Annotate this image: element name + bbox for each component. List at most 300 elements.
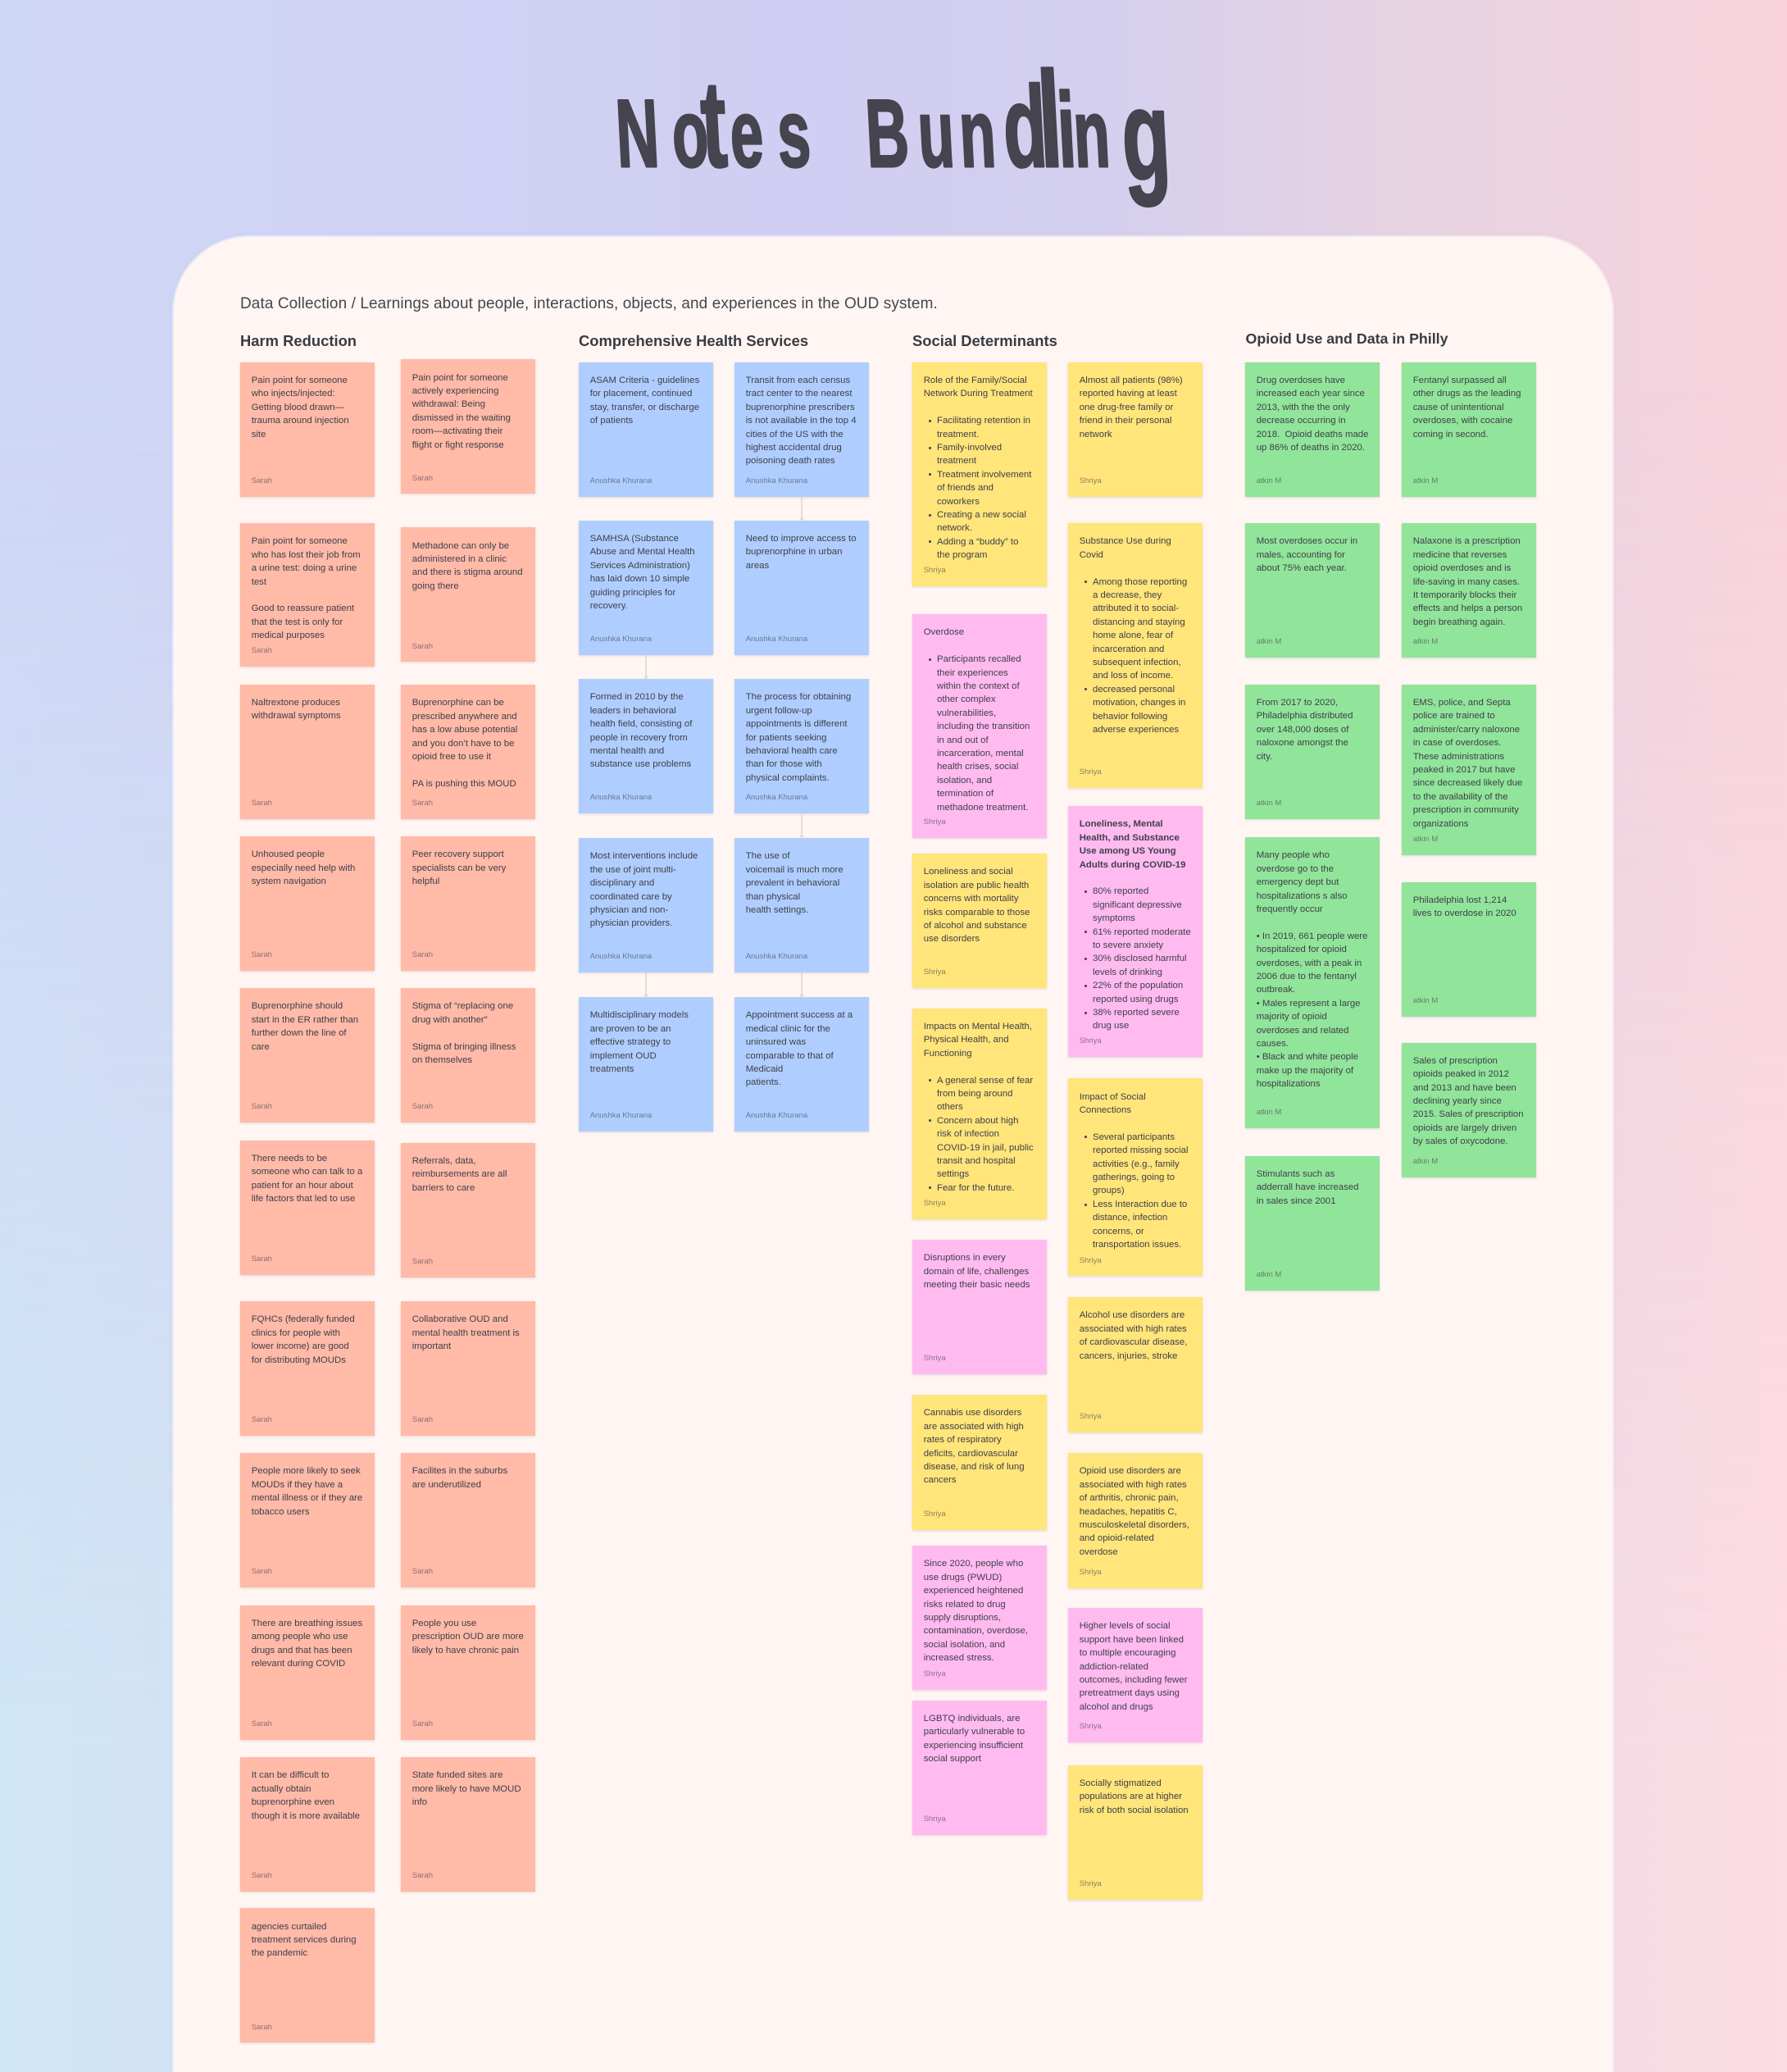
note: opioid use disorders: of arthritis, chronic pain, <box>1080 1493 1179 1503</box>
note: curtailed services: the pandemic <box>252 1948 307 1958</box>
note: EMS and police: since decreased likely due <box>1413 778 1522 788</box>
note: joint interventions: the use of joint multi- <box>590 865 676 875</box>
note: loneliness young adults: Shriya <box>1080 1036 1102 1045</box>
note: transit to prescribers: tract center to the nearest <box>746 389 852 398</box>
note: since 2020: contamination, overdose, <box>924 1626 1028 1636</box>
note: LGBTQ individuals: particularly vulnerable to <box>924 1727 1025 1737</box>
note: substance use during covid: decreased personal <box>1093 685 1175 694</box>
note: chronic pain <box>401 1605 535 1740</box>
note: emergency dept: outbreak. <box>1257 985 1295 995</box>
note: drug-free network: Shriya <box>1080 476 1102 485</box>
note: curtailed services: agencies curtailed <box>252 1922 327 1932</box>
note: impacts on health: transit and hospital <box>937 1156 1016 1166</box>
note: ASAM criteria: of patients <box>590 416 633 426</box>
note: urgent follow-up: behavioral health care <box>746 746 838 756</box>
note: stigma <box>401 988 535 1123</box>
note: withdrawal pain point: Pain point for someone <box>412 373 508 383</box>
note: more likely to seek MOUDs <box>240 1453 375 1587</box>
note: LGBTQ individuals: social support <box>924 1754 981 1764</box>
note: emergency dept: • In 2019, 661 people were <box>1257 931 1367 941</box>
note: naloxone distributed <box>1245 685 1380 819</box>
note: transit to prescribers: highest accidental drug <box>746 443 842 453</box>
note: urine test pain point: that the test is only for <box>252 617 343 627</box>
note: appointment success: Medicaid <box>746 1064 783 1074</box>
note: joint interventions: disciplinary and <box>590 878 654 888</box>
note: nalaxone: It temporarily blocks their <box>1413 590 1516 600</box>
note: chronic pain: People you use <box>412 1619 476 1628</box>
note: blood drawn pain point: trauma around injection <box>252 416 349 426</box>
note: peer recovery: helpful <box>412 877 439 886</box>
note: loneliness young adults: Use among US Young <box>1080 846 1176 856</box>
note: EMS and police: prescription in community <box>1413 805 1519 815</box>
note: impacts on health: Functioning <box>924 1049 972 1059</box>
note: collaborative treatment: Collaborative OUD and <box>412 1314 508 1324</box>
note: impact of social connections: reported missing social <box>1093 1145 1188 1155</box>
note: impact of social connections: distance, infection <box>1093 1213 1167 1223</box>
note: urgent follow-up: urgent follow-up <box>746 706 812 716</box>
note: naltrexone: withdrawal symptoms <box>252 711 341 721</box>
note: impact of social connections: concerns, or <box>1093 1227 1144 1236</box>
note: impacts on health: settings <box>937 1169 969 1179</box>
note: withdrawal pain point: actively experiencing <box>412 386 498 396</box>
note: voicemail: health settings. <box>746 905 808 915</box>
title: Notes Bundling: n <box>957 80 998 187</box>
note: loneliness young adults: 61% reported moderate <box>1093 927 1191 937</box>
note: overdose: including the transition <box>937 722 1030 731</box>
note: impact of social connections: groups) <box>1093 1186 1125 1195</box>
note: naloxone distributed: over 148,000 doses of <box>1257 725 1348 735</box>
note: stigma: drug with another” <box>412 1015 487 1025</box>
heading: Harm Reduction: Harm Reduction <box>240 332 357 349</box>
title: Notes Bundling: g <box>1118 65 1174 207</box>
note: loneliness young adults: drug use <box>1093 1021 1129 1031</box>
note: loneliness public health: Shriya <box>924 968 946 977</box>
note: transit to prescribers: poisoning death rates <box>746 456 835 466</box>
note: transit to prescribers: is not available in the top 4 <box>746 416 857 426</box>
note: blood drawn pain point <box>240 362 375 497</box>
note: joint interventions: coordinated care by <box>590 892 672 902</box>
note: FQHCs: for distributing MOUDs <box>252 1355 346 1365</box>
heading: Social Determinants: Social Determinants <box>912 332 1057 349</box>
note: multidisciplinary models: treatments <box>590 1064 634 1074</box>
note: blood drawn pain point: Pain point for someone <box>252 376 348 385</box>
note: improve access: Anushka Khurana <box>746 635 807 644</box>
note: overdose: incarceration, mental <box>937 749 1024 758</box>
note: urgent follow-up: appointments is different <box>746 719 848 729</box>
note: drug overdoses increased: up 86% of deaths in 2020. <box>1257 443 1365 453</box>
note: curtailed services: treatment services during <box>252 1935 357 1945</box>
note: more likely to seek MOUDs: MOUDs if they have a <box>252 1480 343 1490</box>
note: emergency dept: emergency dept but <box>1257 877 1339 887</box>
note: joint interventions <box>579 838 713 972</box>
note: loneliness young adults: 80% reported <box>1093 886 1148 896</box>
note: buprenorphine in ER: Sarah <box>252 1102 272 1111</box>
note: barriers to care: Referrals, data, <box>412 1156 476 1166</box>
note: fentanyl <box>1402 362 1536 497</box>
note: voicemail: The use of <box>746 851 790 861</box>
title: Notes Bundling: o <box>669 80 711 187</box>
note: breathing issues: among people who use <box>252 1632 348 1642</box>
panel: Opioid Use and Data in Philly <box>1244 330 1537 1292</box>
note: emergency dept: Many people who <box>1257 850 1330 860</box>
note: LGBTQ individuals: experiencing insufficient <box>924 1741 1023 1751</box>
note: alcohol use disorders: of cardiovascular disease, <box>1080 1337 1187 1347</box>
note: ASAM criteria: ASAM Criteria - guidelines <box>590 376 699 385</box>
note: overdose: their experiences <box>937 667 1008 677</box>
note: withdrawal pain point: withdrawal: Being <box>412 399 485 409</box>
note: impacts on health: risk of infection <box>937 1129 999 1139</box>
note: since 2020: Shriya <box>924 1669 946 1678</box>
note: loneliness young adults: symptoms <box>1093 913 1135 923</box>
note: improve access: buprenorphine in urban <box>746 547 842 557</box>
note: urine test pain point: test <box>252 577 266 587</box>
note: urine test pain point: Good to reassure patient <box>252 603 354 613</box>
note: appointment success: medical clinic for the <box>746 1024 830 1034</box>
note: Philadelphia lost lives: lives to overdose in 2020 <box>1413 908 1516 918</box>
note: FQHCs: lower income) are good <box>252 1341 349 1351</box>
note: formed in 2010: health field, consisting of <box>590 719 692 729</box>
note: loneliness young adults: to severe anxiety <box>1093 940 1163 950</box>
note: formed in 2010: Formed in 2010 by the <box>590 692 684 702</box>
note: substance use during covid: incarceration and <box>1093 644 1164 654</box>
note: higher social support <box>1068 1608 1203 1742</box>
note: substance use during covid: behavior following <box>1093 712 1167 722</box>
note: substance use during covid <box>1068 523 1203 788</box>
note: cannabis use disorders: deficits, cardiovascular <box>924 1449 1018 1459</box>
note: EMS and police: administer/carry naloxone <box>1413 725 1520 735</box>
note: role of family: Family-involved <box>937 443 1002 453</box>
note: emergency dept: overdoses, with a peak in <box>1257 959 1362 968</box>
note: impact of social connections: Shriya <box>1080 1256 1102 1265</box>
note: state funded sites: more likely to have MOUD <box>412 1784 521 1794</box>
note: suburban facilities: Facilites in the suburbs <box>412 1466 507 1476</box>
note: role of family: Adding a “buddy” to <box>937 537 1018 547</box>
note: role of family: Role of the Family/Social <box>924 376 1027 385</box>
note: withdrawal pain point: flight or fight response <box>412 440 504 450</box>
note: appointment success <box>734 997 869 1132</box>
note: role of family: Creating a new social <box>937 510 1026 520</box>
note: urgent follow-up: Anushka Khurana <box>746 793 807 802</box>
note: urine test pain point: who has lost their job from <box>252 550 361 560</box>
note: methadone clinic: administered in a clinic <box>412 554 507 564</box>
note: transit to prescribers <box>734 362 869 497</box>
note: cannabis use disorders: disease, and risk of lung <box>924 1462 1025 1472</box>
note: fentanyl: Fentanyl surpassed all <box>1413 376 1507 385</box>
note: unhoused people: system navigation <box>252 877 326 886</box>
note: multidisciplinary models: effective strategy to <box>590 1037 671 1047</box>
note: substance use during covid: home alone, fear of <box>1093 631 1173 640</box>
note: joint interventions: physician providers. <box>590 918 672 928</box>
note: males <box>1245 523 1380 658</box>
note: buprenorphine prescribed: PA is pushing this MOUD <box>412 779 516 789</box>
note: loneliness young adults: Adults during COVID-19 <box>1080 860 1185 870</box>
note: impact of social connections: Impact of Social <box>1080 1092 1146 1102</box>
note: Philadelphia lost lives: atkin M <box>1413 996 1438 1005</box>
note: breathing issues: drugs and that has been <box>252 1646 352 1655</box>
note: role of family: network. <box>937 523 972 533</box>
note: role of family: of friends and <box>937 483 994 493</box>
note: difficult to obtain: Sarah <box>252 1871 272 1880</box>
note: loneliness public health: concerns with mortality <box>924 894 1019 904</box>
note: barriers to care: barriers to care <box>412 1183 475 1193</box>
note: higher social support: alcohol and drugs <box>1080 1702 1153 1712</box>
note: drug overdoses increased: 2013, with the the only <box>1257 403 1350 412</box>
note: nalaxone: effects and helps a person <box>1413 603 1522 613</box>
note: urine test pain point <box>240 523 375 667</box>
note: overdose: in and out of <box>937 735 989 745</box>
note: higher social support: pretreatment days using <box>1080 1688 1180 1698</box>
note: more likely to seek MOUDs: mental illness or if they are <box>252 1493 362 1503</box>
note: drug overdoses increased <box>1245 362 1380 497</box>
note: blood drawn pain point: Sarah <box>252 476 272 485</box>
note: formed in 2010: people in recovery from <box>590 733 688 743</box>
note: since 2020 <box>912 1546 1047 1690</box>
note: state funded sites: Sarah <box>412 1871 433 1880</box>
note: urgent follow-up: for patients seeking <box>746 733 826 743</box>
title: Notes Bundling <box>613 44 1174 208</box>
note: buprenorphine prescribed: Sarah <box>412 799 433 808</box>
note: alcohol use disorders: Alcohol use disorders are <box>1080 1310 1185 1320</box>
heading: Opioid Use and Data in Philly: Opioid Use and Data in Philly <box>1246 330 1448 347</box>
note: buprenorphine prescribed: and you don’t have to be <box>412 739 514 749</box>
note: difficult to obtain <box>240 1757 375 1892</box>
note: substance use during covid: Covid <box>1080 550 1103 560</box>
note: barriers to care <box>401 1143 535 1277</box>
note: someone to talk to: Sarah <box>252 1255 272 1264</box>
note: since 2020: use drugs (PWUD) <box>924 1573 1002 1582</box>
note: role of family: the program <box>937 550 987 560</box>
note: appointment success: patients. <box>746 1077 781 1087</box>
note: impact of social connections: gatherings, going to <box>1093 1173 1175 1182</box>
note: difficult to obtain: actually obtain <box>252 1784 311 1794</box>
note: role of family <box>912 362 1047 586</box>
note: suburban facilities: are underutilized <box>412 1480 481 1490</box>
note: substance use during covid: subsequent infection, <box>1093 658 1181 667</box>
note: buprenorphine in ER: Buprenorphine should <box>252 1001 343 1011</box>
note: cannabis use disorders: are associated with high <box>924 1422 1024 1432</box>
note: SAMHSA: Services Administration) <box>590 561 690 571</box>
note: loneliness young adults: reported using drugs <box>1093 995 1178 1004</box>
note: disruptions: domain of life, challenges <box>924 1267 1029 1277</box>
note: curtailed services: Sarah <box>252 2023 272 2032</box>
note: FQHCs: Sarah <box>252 1415 272 1424</box>
note: emergency dept: hospitalizations s also <box>1257 891 1348 901</box>
note: suburban facilities <box>401 1453 535 1587</box>
note: cannabis use disorders: rates of respiratory <box>924 1435 1002 1445</box>
note: drug-free network <box>1068 362 1203 497</box>
note: substance use during covid: a decrease, they <box>1093 590 1162 600</box>
note: fentanyl: coming in second. <box>1413 430 1489 439</box>
note: impacts on health: others <box>937 1102 963 1112</box>
note: appointment success: Appointment success at a <box>746 1010 853 1020</box>
note: socially stigmatized: Socially stigmatized <box>1080 1778 1162 1788</box>
arrow: transit to access <box>799 497 804 521</box>
note: unhoused people: especially need help with <box>252 863 355 873</box>
arrow: voicemail to appointment success <box>799 972 804 997</box>
arrow: interventions to multidisciplinary <box>643 972 648 997</box>
note: withdrawal pain point <box>401 359 535 494</box>
note: emergency dept: overdose go to the <box>1257 864 1334 874</box>
note: overdose: other complex <box>937 694 996 704</box>
note: impact of social connections: transportation issues. <box>1093 1240 1181 1250</box>
subtitle: Data Collection / Learnings about people, interactions, objects, and experiences in the OUD system. <box>240 295 938 312</box>
note: someone to talk to <box>240 1140 375 1274</box>
note: EMS and police: police are trained to <box>1413 711 1495 721</box>
title: Notes Bundling: l <box>1034 44 1066 196</box>
note: impacts on health: from being around <box>937 1089 1012 1099</box>
note: voicemail: voicemail is much more <box>746 865 843 875</box>
note: EMS and police: in case of overdoses. <box>1413 738 1501 748</box>
note: alcohol use disorders: Shriya <box>1080 1412 1102 1421</box>
note: collaborative treatment: Sarah <box>412 1415 433 1424</box>
note: multidisciplinary models: Anushka Khurana <box>590 1111 652 1120</box>
note: difficult to obtain: It can be difficult to <box>252 1770 329 1780</box>
note: drug-free network: reported having at least <box>1080 389 1177 398</box>
note: voicemail: prevalent in behavioral <box>746 878 839 888</box>
note: FQHCs: clinics for people with <box>252 1328 340 1338</box>
note: stigma: on themselves <box>412 1055 472 1065</box>
note: opioid use disorders: musculoskeletal disorders, <box>1080 1520 1189 1530</box>
note: buprenorphine in ER: start in the ER rather than <box>252 1015 358 1025</box>
note: opioid use disorders: associated with high rates <box>1080 1480 1187 1490</box>
note: naltrexone: Naltrextone produces <box>252 698 340 708</box>
note: nalaxone: life-saving in many cases. <box>1413 577 1520 587</box>
note: disruptions: Shriya <box>924 1354 946 1363</box>
note: overdose: Shriya <box>924 817 946 827</box>
note: urgent follow-up: The process for obtaining <box>746 692 851 702</box>
note: sales of prescription opioids: opioids peaked in 2012 <box>1413 1069 1509 1079</box>
note: loneliness young adults: 30% disclosed harmful <box>1093 954 1187 963</box>
note: buprenorphine prescribed: opioid free to use it <box>412 752 491 762</box>
note: loneliness young adults: Loneliness, Mental <box>1080 819 1163 829</box>
note: overdose: Overdose <box>924 627 964 637</box>
note: blood drawn pain point: site <box>252 430 266 439</box>
note: opioid use disorders: Shriya <box>1080 1568 1102 1577</box>
note: overdose: health crises, social <box>937 762 1018 772</box>
note: formed in 2010: substance use problems <box>590 759 691 769</box>
note: ASAM criteria: for placement, continued <box>590 389 692 398</box>
note: role of family: Network During Treatment <box>924 389 1033 398</box>
note: urine test pain point: a urine test: doing a urine <box>252 563 357 573</box>
note: FQHCs <box>240 1301 375 1436</box>
note: EMS and police: atkin M <box>1413 835 1438 844</box>
note: more likely to seek MOUDs: People more likely to seek <box>252 1466 361 1476</box>
note: loneliness public health: Loneliness and social <box>924 867 1013 877</box>
note: overdose: isolation, and <box>937 776 992 786</box>
note: opioid use disorders: overdose <box>1080 1547 1118 1557</box>
note: role of family: Treatment involvement <box>937 470 1031 480</box>
note: SAMHSA: Abuse and Mental Health <box>590 547 695 557</box>
note: higher social support: support have been linked <box>1080 1635 1184 1645</box>
title: Notes Bundling: i <box>1054 71 1079 189</box>
note: EMS and police: EMS, police, and Septa <box>1413 698 1511 708</box>
note: socially stigmatized: risk of both social isolation <box>1080 1806 1189 1815</box>
note: urine test pain point: Pain point for someone <box>252 536 348 546</box>
note: SAMHSA: Anushka Khurana <box>590 635 652 644</box>
note: overdose: within the context of <box>937 681 1020 691</box>
note: buprenorphine in ER <box>240 988 375 1123</box>
note: impact of social connections: activities (e.g., family <box>1093 1159 1180 1169</box>
note: fentanyl: other drugs as the leading <box>1413 389 1521 398</box>
note: stimulants <box>1245 1156 1380 1291</box>
note: unhoused people: Unhoused people <box>252 849 325 859</box>
note: LGBTQ individuals: LGBTQ individuals, are <box>924 1714 1020 1724</box>
note: impact of social connections: Less Interaction due to <box>1093 1200 1187 1209</box>
note: role of family: treatment. <box>937 430 979 439</box>
note: since 2020: experienced heightened <box>924 1586 1023 1596</box>
note: role of family: Shriya <box>924 566 946 575</box>
note: substance use during covid: motivation, changes in <box>1093 698 1185 708</box>
note: EMS and police: to the availability of the <box>1413 792 1508 802</box>
note: opioid use disorders: and opioid-related <box>1080 1533 1154 1543</box>
note: since 2020: supply disruptions, <box>924 1613 1001 1623</box>
note: breathing issues: There are breathing issues <box>252 1619 362 1628</box>
note: withdrawal pain point: dismissed in the waiting <box>412 413 511 423</box>
note: impacts on health: Shriya <box>924 1199 946 1208</box>
note: emergency dept: • Black and white people <box>1257 1052 1358 1062</box>
note: naloxone distributed: From 2017 to 2020, <box>1257 698 1338 708</box>
note: fentanyl: overdoses, with cocaine <box>1413 416 1512 426</box>
note: higher social support: addiction-related <box>1080 1662 1148 1672</box>
note: higher social support: outcomes, including fewer <box>1080 1675 1187 1685</box>
title: Notes Bundling: e <box>727 80 766 187</box>
note: higher social support: to multiple encouraging <box>1080 1648 1175 1658</box>
note: sales of prescription opioids: declining yearly since <box>1413 1096 1502 1106</box>
note: collaborative treatment: important <box>412 1341 451 1351</box>
note: substance use during covid: Substance Use during <box>1080 536 1171 546</box>
note: nalaxone: begin breathing again. <box>1413 617 1505 627</box>
note: impact of social connections <box>1068 1078 1203 1276</box>
note: ASAM criteria: Anushka Khurana <box>590 476 652 485</box>
note: transit to prescribers: buprenorphine prescribers <box>746 403 855 412</box>
note: emergency dept: causes. <box>1257 1039 1289 1049</box>
note: suburban facilities: Sarah <box>412 1567 433 1576</box>
note: EMS and police: These administrations <box>1413 752 1504 762</box>
note: males: atkin M <box>1257 637 1281 646</box>
note: improve access: Need to improve access to <box>746 534 857 544</box>
note: impacts on health: COVID-19 in jail, public <box>937 1143 1034 1153</box>
note: emergency dept: hospitalized for opioid <box>1257 945 1347 954</box>
note: males: about 75% each year. <box>1257 563 1347 573</box>
note: sales of prescription opioids: 2015. Sales of prescription <box>1413 1109 1524 1119</box>
note: buprenorphine prescribed: prescribed anywhere and <box>412 712 517 722</box>
note: socially stigmatized <box>1068 1765 1203 1899</box>
note: urgent follow-up: physical complaints. <box>746 773 830 783</box>
note: socially stigmatized: Shriya <box>1080 1879 1102 1888</box>
note: methadone clinic: and there is stigma around <box>412 567 523 577</box>
note: withdrawal pain point: Sarah <box>412 474 433 483</box>
note: EMS and police: peaked in 2017 but have <box>1413 765 1515 775</box>
note: FQHCs: FQHCs (federally funded <box>252 1314 355 1324</box>
note: Philadelphia lost lives <box>1402 882 1536 1017</box>
note: formed in 2010: leaders in behavioral <box>590 706 676 716</box>
note: naltrexone: Sarah <box>252 799 272 808</box>
note: nalaxone: atkin M <box>1413 637 1438 646</box>
note: EMS and police: organizations <box>1413 819 1468 829</box>
note: naloxone distributed: naloxone amongst the <box>1257 738 1348 748</box>
note: loneliness young adults: significant depressive <box>1093 900 1182 910</box>
note: peer recovery: Peer recovery support <box>412 849 504 859</box>
note: chronic pain: Sarah <box>412 1719 433 1728</box>
note: multidisciplinary models <box>579 997 713 1132</box>
note: emergency dept: hospitalizations <box>1257 1079 1321 1089</box>
note: breathing issues <box>240 1605 375 1740</box>
note: chronic pain: likely to have chronic pain <box>412 1646 519 1655</box>
note: urgent follow-up: than for those with <box>746 759 822 769</box>
note: breathing issues: Sarah <box>252 1719 272 1728</box>
note: emergency dept: • Males represent a large <box>1257 999 1361 1009</box>
note: socially stigmatized: populations are at higher <box>1080 1792 1182 1801</box>
